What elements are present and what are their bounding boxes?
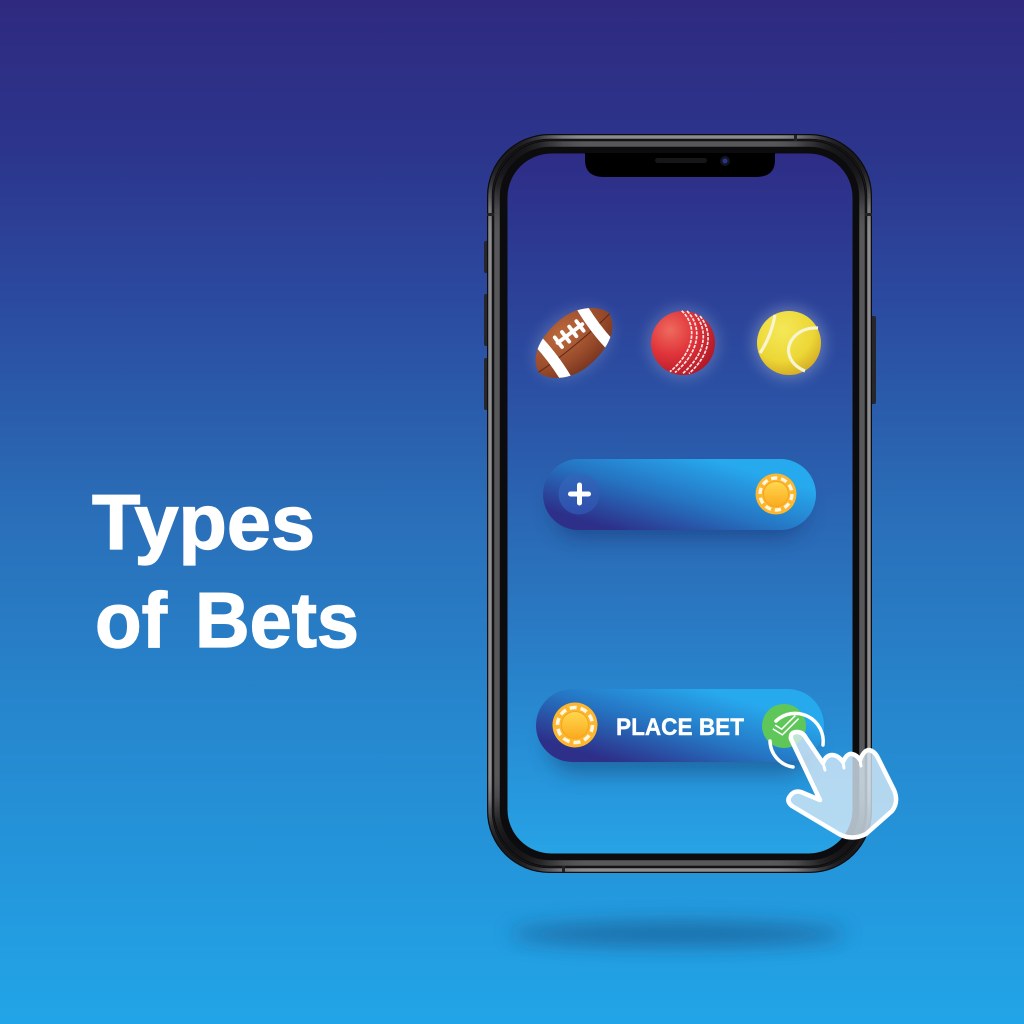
place bet shadow	[548, 715, 812, 773]
button label: PLACE BET	[616, 714, 744, 741]
stake button shadow	[553, 480, 806, 538]
side buttons	[484, 241, 876, 410]
icon: green check	[762, 704, 806, 748]
title: of	[95, 576, 168, 664]
phone	[484, 134, 876, 873]
stake button	[543, 459, 816, 538]
place bet button	[536, 689, 824, 773]
phone ground shadow	[510, 922, 846, 946]
screen	[508, 154, 852, 854]
tap ripple	[770, 713, 823, 767]
title: Types	[92, 478, 315, 566]
stake button body	[543, 459, 816, 530]
title: Bets	[195, 576, 359, 664]
icon: american football	[530, 304, 616, 382]
icon: tapping hand	[770, 713, 896, 838]
icon: coin chip	[552, 702, 598, 748]
notch	[585, 153, 775, 177]
place bet body	[536, 689, 824, 762]
icon: tennis ball	[753, 307, 825, 379]
icon: plus	[558, 474, 600, 514]
camera	[720, 156, 730, 166]
title	[92, 478, 359, 664]
knuckle lines	[823, 760, 861, 770]
speaker	[655, 158, 707, 163]
icon: cricket ball	[647, 307, 719, 379]
icon: coin chip	[756, 474, 796, 514]
phone frame	[487, 134, 872, 873]
hand	[788, 732, 896, 838]
